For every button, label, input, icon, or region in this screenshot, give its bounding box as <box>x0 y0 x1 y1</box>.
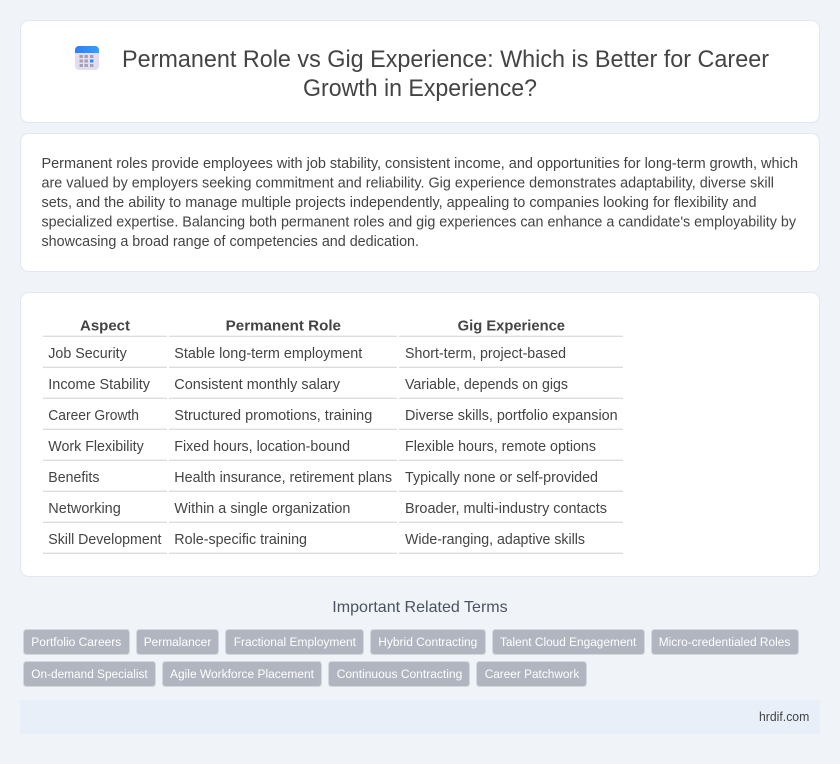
table header: Permanent Role <box>226 318 341 334</box>
row: income stability: Income Stability <box>48 377 151 393</box>
panel: title card <box>20 20 820 122</box>
row: career growth: Structured promotions, training <box>174 408 372 424</box>
tag: Fractional Employment <box>226 630 364 654</box>
tag: Hybrid Contracting: Hybrid Contracting <box>378 635 477 649</box>
text block: summary: are valued by employers seeking commitment and reliability. Gig experience demonstrates adaptability, diverse skill <box>42 176 774 192</box>
table header: Aspect <box>80 318 130 334</box>
panel: summary paragraph <box>20 134 820 272</box>
text block: summary: specialized expertise. Balancing both permanent roles and gig experiences can enhance a candidate's employability by <box>42 214 797 230</box>
tag: Agile Workforce Placement: Agile Workforce Placement <box>170 667 315 681</box>
footer <box>20 700 820 734</box>
row: networking: Networking <box>48 501 121 517</box>
row: career growth: Career Growth <box>48 408 139 424</box>
tag: Continuous Contracting <box>328 662 470 686</box>
tag: Continuous Contracting: Continuous Contracting <box>337 667 462 681</box>
row: income stability: Consistent monthly salary <box>174 377 341 393</box>
row: benefits <box>48 470 598 486</box>
tag: Fractional Employment: Fractional Employment <box>234 635 357 649</box>
tag: Agile Workforce Placement <box>162 662 322 686</box>
text block: summary: Permanent roles provide employees with job stability, consistent income, and opportunities for long-term growth, which <box>42 156 798 172</box>
row: career growth: Diverse skills, portfolio expansion <box>405 408 618 424</box>
text block: summary <box>42 156 798 250</box>
tags: related terms <box>24 630 798 686</box>
row: skill development: Wide-ranging, adaptive skills <box>405 532 585 548</box>
panel: comparison table <box>20 292 820 576</box>
row: networking: Within a single organization <box>174 501 350 517</box>
row: benefits: Typically none or self-provided <box>405 470 598 486</box>
tag: On-demand Specialist <box>24 662 156 686</box>
tag: Hybrid Contracting <box>370 630 486 654</box>
tag: Portfolio Careers: Portfolio Careers <box>31 635 121 649</box>
row: networking: Broader, multi-industry contacts <box>405 501 607 517</box>
row: job security: Short-term, project-based <box>405 346 566 362</box>
row: benefits: Benefits <box>48 470 99 486</box>
title: Growth in Experience? <box>303 75 537 102</box>
text block: summary: showcasing a broad range of competencies and dedication. <box>42 234 419 250</box>
row: job security <box>48 346 566 362</box>
row: skill development: Role-specific training <box>174 532 307 548</box>
tag: Career Patchwork <box>476 662 586 686</box>
row: work flexibility <box>48 439 596 455</box>
row: benefits: Health insurance, retirement plans <box>174 470 392 486</box>
tag: Talent Cloud Engagement: Talent Cloud Engagement <box>500 635 637 649</box>
footer text: hrdif.com <box>759 709 809 724</box>
title: Permanent Role vs Gig Experience: Which is Better for Career <box>122 46 769 73</box>
row: work flexibility: Work Flexibility <box>48 439 144 455</box>
tag: Portfolio Careers <box>24 630 130 654</box>
row: work flexibility: Flexible hours, remote options <box>405 439 596 455</box>
table header <box>80 318 565 334</box>
icon: calendar <box>75 46 99 70</box>
text block: summary: sets, and the ability to manage multiple projects independently, appealing to companies looking for flexibility and <box>42 195 756 211</box>
tag: Micro-credentialed Roles <box>652 630 798 654</box>
tag: Micro-credentialed Roles: Micro-credentialed Roles <box>659 635 790 649</box>
table header: Gig Experience <box>458 318 565 334</box>
row: career growth <box>48 408 618 424</box>
title <box>122 46 769 102</box>
row: skill development: Skill Development <box>48 532 161 548</box>
tag: Talent Cloud Engagement <box>492 630 644 654</box>
row: networking <box>48 501 607 517</box>
row: skill development <box>48 532 585 548</box>
row: work flexibility: Fixed hours, location-bound <box>174 439 350 455</box>
heading: important related terms: Important Related Terms <box>332 599 508 616</box>
tag: On-demand Specialist: On-demand Specialist <box>31 667 148 681</box>
row: income stability <box>48 377 568 393</box>
tag: Career Patchwork: Career Patchwork <box>485 667 580 681</box>
tag: Permalancer: Permalancer <box>144 635 211 649</box>
row: income stability: Variable, depends on gigs <box>405 377 568 393</box>
row: job security: Stable long-term employment <box>174 346 362 362</box>
row: job security: Job Security <box>48 346 127 362</box>
tag: Permalancer <box>136 630 218 654</box>
